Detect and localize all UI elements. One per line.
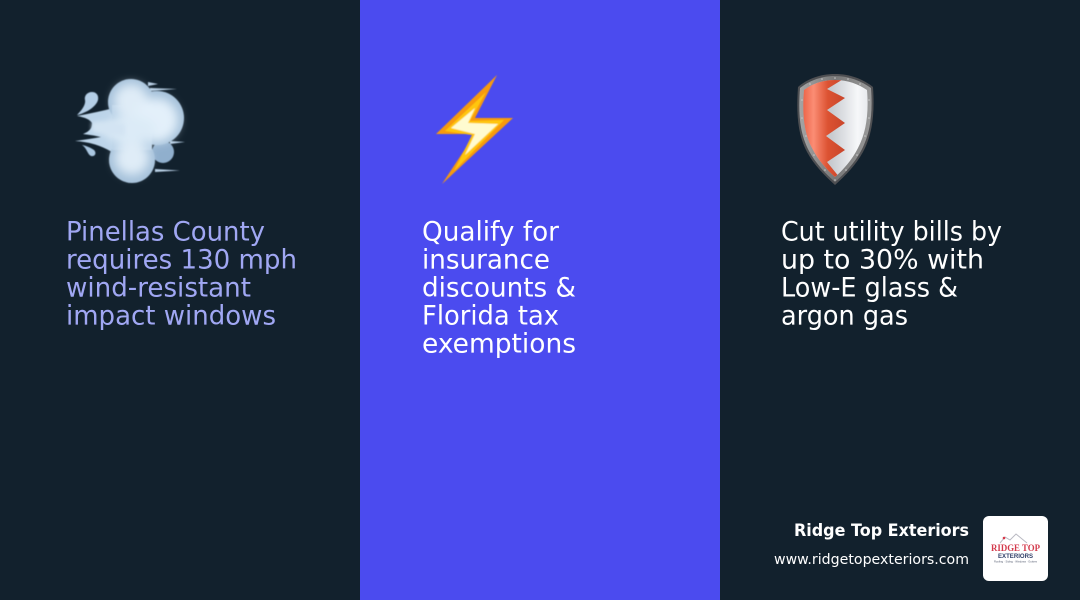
logo badge [983, 516, 1048, 581]
heading text: energy savings: up to 30% with [781, 244, 984, 275]
heading text: insurance and tax: Florida tax [422, 300, 559, 331]
heading text: wind requirement: Pinellas County [66, 216, 265, 247]
heading text: wind requirement: wind-resistant [66, 272, 251, 303]
heading text: insurance and tax: exemptions [422, 328, 576, 359]
heading text: energy savings [781, 216, 1002, 331]
logo badge: RIDGE TOP [991, 544, 1040, 554]
heading text: wind requirement [66, 216, 297, 331]
heading text: energy savings: Cut utility bills by [781, 216, 1002, 247]
logo badge: EXTERIORS [998, 553, 1034, 560]
panel: right background [720, 0, 1080, 600]
panel: left background [0, 0, 360, 600]
heading text: energy savings: argon gas [781, 300, 908, 331]
icon: wind cloud [75, 79, 185, 183]
heading text: energy savings: Low-E glass & [781, 272, 958, 303]
brand name: Ridge Top Exteriors [794, 521, 969, 541]
icon: lightning bolt [436, 75, 513, 184]
logo badge: Roofing · Siding · Windows · Gutters [994, 560, 1037, 564]
heading text: insurance and tax: discounts & [422, 272, 576, 303]
heading text: insurance and tax [422, 216, 576, 359]
heading text: wind requirement: impact windows [66, 300, 276, 331]
heading text: wind requirement: requires 130 mph [66, 244, 297, 275]
heading text: insurance and tax: insurance [422, 244, 550, 275]
icon: shield [797, 74, 874, 185]
heading text: insurance and tax: Qualify for [422, 216, 560, 247]
website url: www.ridgetopexteriors.com [774, 552, 969, 568]
panel: centre background [360, 0, 720, 600]
